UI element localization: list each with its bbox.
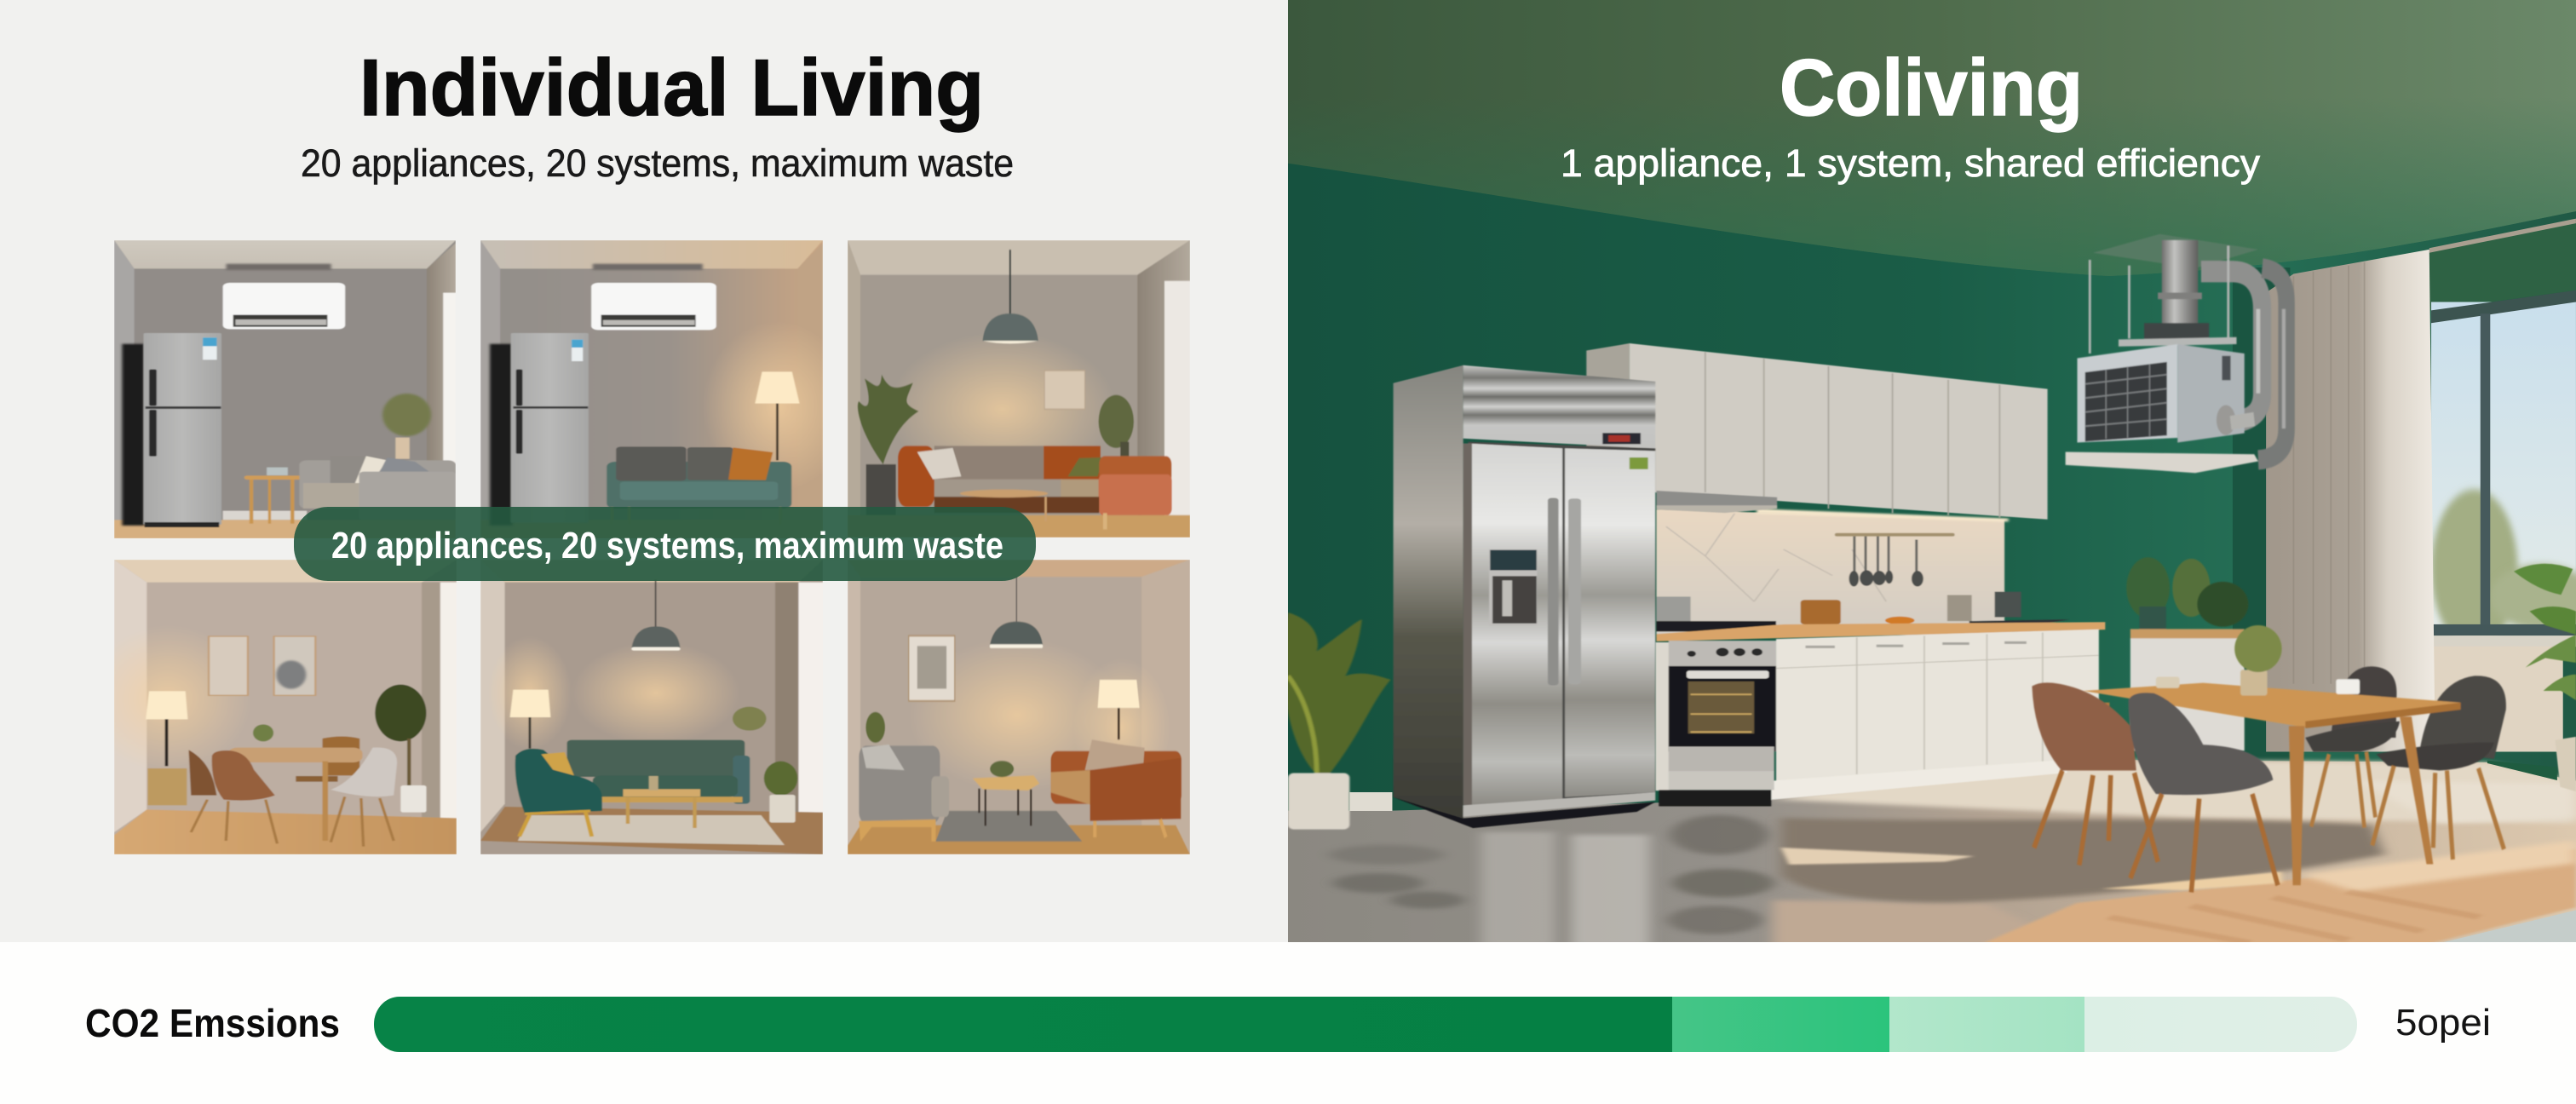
panel: coliving <box>1283 0 2576 946</box>
back counter and plants <box>2126 557 2248 750</box>
window, view, radiator and curtain <box>2266 219 2576 752</box>
subtitle: coliving: 1 appliance, 1 system, shared efficiency <box>1561 141 2261 185</box>
fridge: stainless steel double door <box>1394 365 1655 828</box>
room 4: dining table, chairs, table lamp <box>114 560 457 854</box>
panel: individual living <box>0 0 1288 942</box>
room 6: orange sofa, grey armchair, side table <box>848 560 1190 854</box>
kitchen: cabinets, backsplash, counter, oven <box>1586 343 2105 806</box>
bar end label: 5opei <box>2395 1002 2491 1044</box>
bottom strip: CO2 emissions <box>85 997 2491 1052</box>
segmented emissions bar <box>374 997 2357 1052</box>
floor: polished concrete and wood rug with shadows <box>1288 760 2576 946</box>
bar label: CO2 Emssions <box>85 1001 340 1045</box>
central ventilation unit with ducts <box>2066 234 2286 473</box>
heading: coliving: Coliving <box>1780 43 2083 132</box>
plant: left foreground <box>1283 612 1391 830</box>
room 3: sectional sofa, pendant lamp, plants <box>848 240 1190 538</box>
callout pill: 20 appliances <box>294 507 1036 581</box>
room 2: fridge, air conditioner, teal sofa, floor lamp <box>480 240 823 538</box>
callout pill: 20 appliances: 20 appliances, 20 systems, maximum waste <box>331 525 1003 566</box>
dining table with chairs <box>2032 625 2506 893</box>
subtitle: individual living: 20 appliances, 20 systems, maximum waste <box>301 141 1014 185</box>
room shell: ceiling and green wall <box>1288 0 2576 811</box>
plant: right foreground <box>2514 564 2576 791</box>
room 1: fridge, air conditioner, grey sofa <box>114 240 456 538</box>
heading: individual living: Individual Living <box>359 43 984 132</box>
room 5: green sofa, armchair, rug, lamps <box>480 561 823 854</box>
